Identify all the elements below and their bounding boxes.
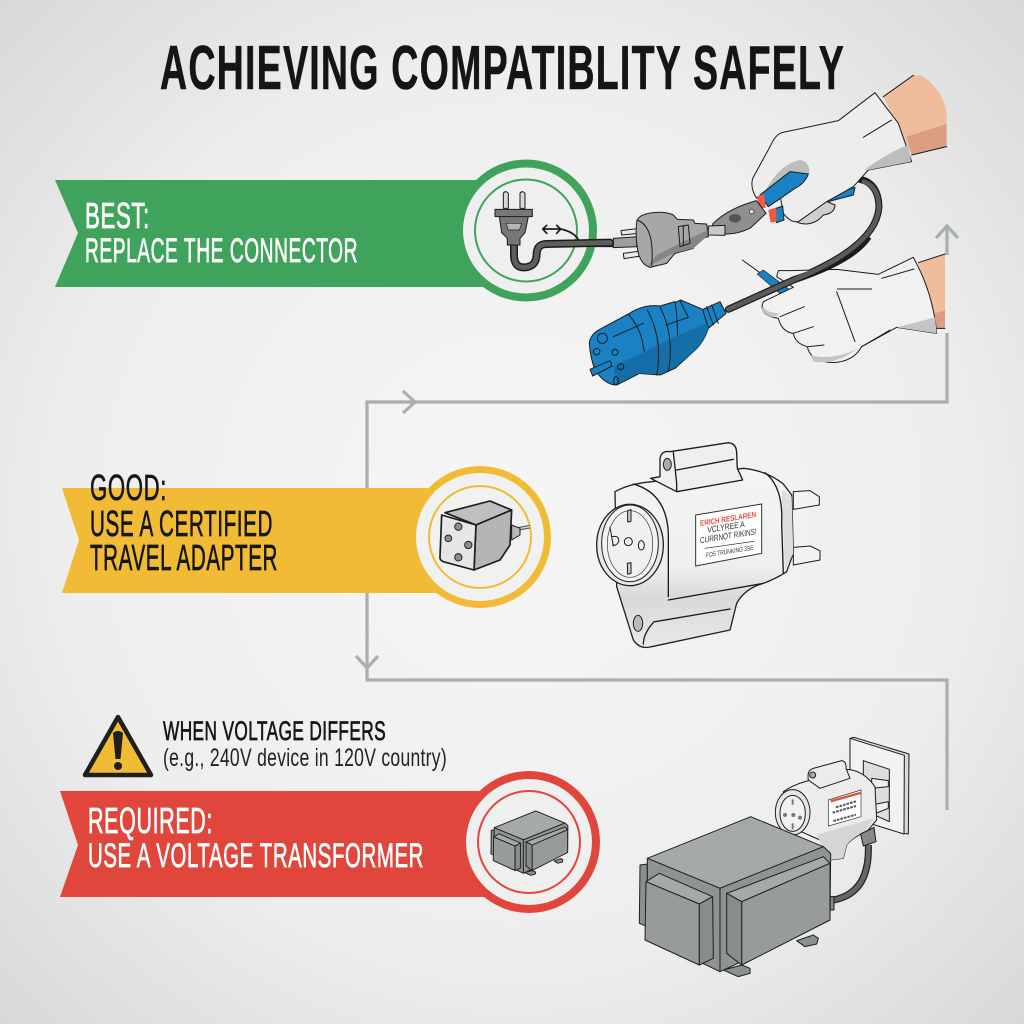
transformer cord — [833, 845, 868, 900]
glove fingers — [793, 200, 835, 224]
upper arm skin — [883, 75, 947, 155]
illustration: transformer plugged into wall — [639, 737, 909, 977]
panel: best option — [55, 160, 610, 302]
red banner — [60, 791, 490, 897]
warning label — [696, 504, 762, 566]
transformer body — [639, 817, 831, 977]
socket face — [597, 504, 663, 586]
lower glove — [762, 257, 937, 363]
best text: BEST: — [85, 195, 150, 236]
label text: CURRNOT RIKINS! — [700, 526, 757, 545]
upper glove — [752, 93, 912, 222]
adapter text line two: TRAVEL ADAPTER — [90, 537, 278, 578]
wall plate — [850, 737, 909, 834]
green banner — [55, 180, 490, 287]
warning note — [85, 716, 447, 775]
icon: warning triangle — [85, 717, 151, 775]
transformer text: USE A VOLTAGE TRANSFORMER — [88, 837, 424, 875]
blue plug — [589, 300, 726, 385]
prongs — [793, 491, 820, 565]
top bracket — [651, 443, 743, 492]
connector text: REPLACE THE CONNECTOR — [85, 232, 358, 270]
illustration: certified adapter — [597, 443, 820, 647]
pliers head — [713, 201, 766, 234]
adapter text: USE A CERTIFIED — [90, 503, 273, 544]
yellow medallion — [409, 466, 551, 608]
panel: required option — [60, 771, 600, 913]
illustration: hands replacing connector — [560, 75, 947, 385]
yellow banner — [62, 488, 440, 593]
pliers handles — [760, 172, 808, 207]
adapter body — [615, 468, 793, 647]
icon: transformer — [491, 811, 568, 875]
green medallion — [455, 160, 597, 302]
cable over glove — [728, 237, 868, 309]
voltage example: (e.g., 240V device in 120V country) — [163, 744, 447, 772]
black cable — [728, 179, 879, 309]
label text: FOS TRUNKING 3SE — [706, 545, 754, 559]
label text: VCLYREE A — [707, 519, 745, 535]
label text: ERICH RESLAREN — [700, 510, 756, 528]
plugged adapter — [775, 761, 877, 860]
lower arm skin — [918, 254, 945, 328]
label text — [700, 510, 757, 560]
voltage heading: WHEN VOLTAGE DIFFERS — [163, 716, 386, 746]
pliers rear handle — [823, 187, 855, 202]
red medallion — [458, 771, 600, 913]
panel: good option — [62, 443, 820, 647]
icon: plug with arrow — [495, 192, 610, 267]
required text: REQUIRED: — [88, 800, 213, 841]
icon: travel adapter cube — [440, 501, 530, 570]
grey plug pins and cable — [621, 228, 647, 259]
flow connector arrows — [356, 225, 958, 810]
good text: GOOD: — [90, 467, 167, 508]
screwdriver — [742, 260, 760, 273]
grey plug — [613, 237, 637, 248]
